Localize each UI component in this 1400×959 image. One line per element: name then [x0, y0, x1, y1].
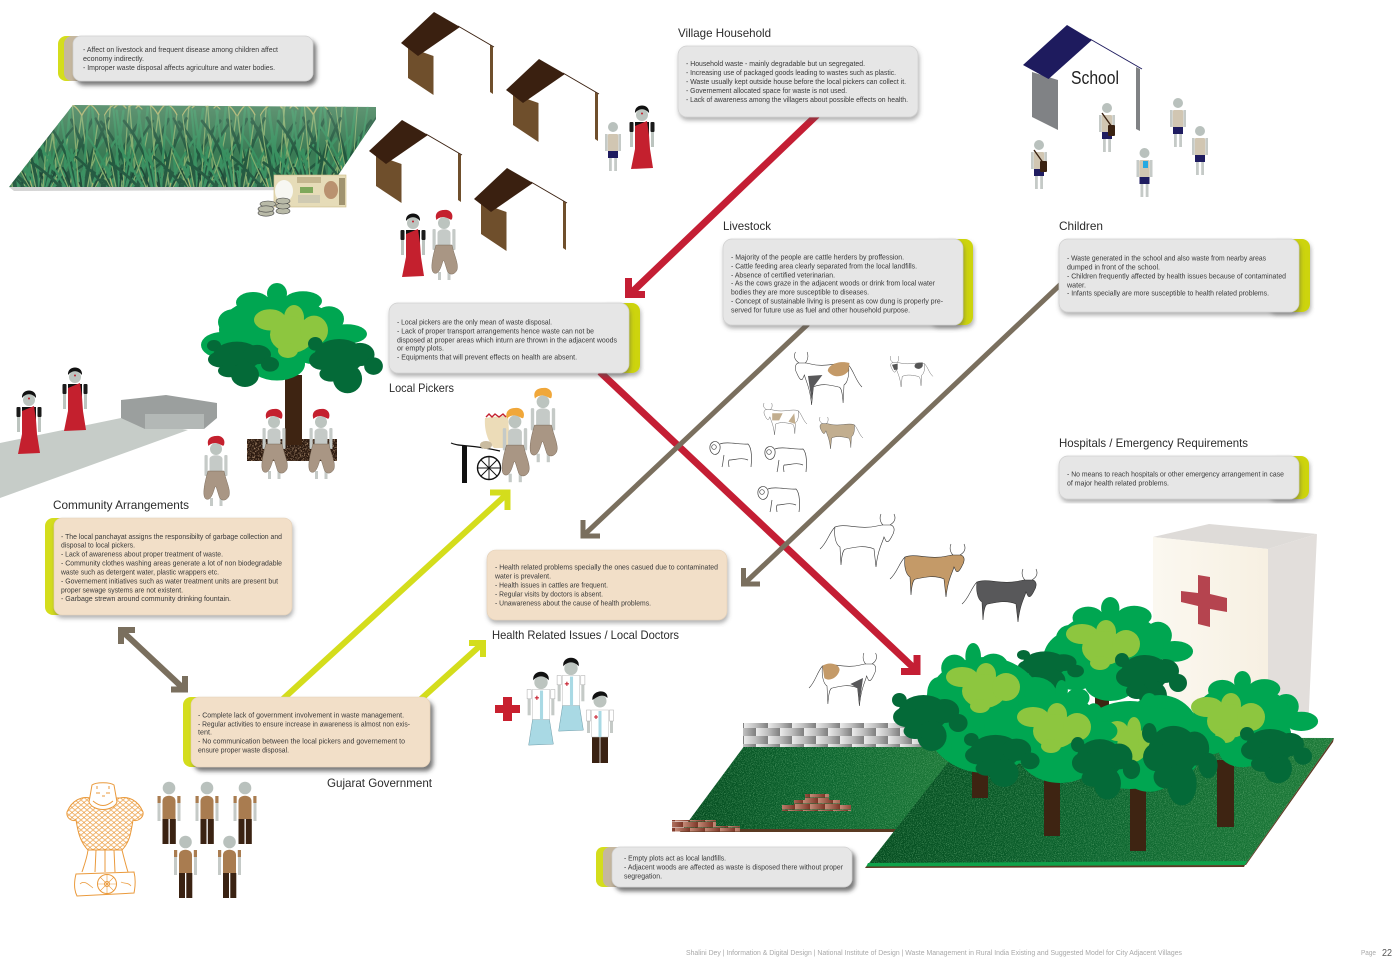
- heading: Local Pickers: [389, 381, 454, 395]
- panel: hospitals: [1059, 436, 1309, 499]
- icon: community men: [204, 409, 334, 506]
- heading: Children: [1059, 219, 1103, 233]
- arrow: government to local pickers: [283, 492, 508, 699]
- panel: livestock: - Absence of certified veterinarian.: [731, 270, 835, 280]
- panel: children: dumped in front of the school.: [1067, 262, 1160, 272]
- panel: hospitals: of major health related problems.: [1067, 478, 1169, 488]
- panel: community arrangements: proper sewage systems are not existent.: [61, 586, 183, 594]
- panel: village household: [678, 26, 918, 117]
- panel: landfills note: segregation.: [624, 872, 662, 880]
- arrow: children to health: [744, 283, 1062, 584]
- footer: [686, 948, 1392, 959]
- left tree: [892, 643, 1057, 773]
- panel: health related issues: - Unawareness about the cause of health problems.: [495, 598, 651, 608]
- panel: children: [1059, 219, 1310, 312]
- panel: community arrangements: - Community clothes washing areas generate a lot of non biodegradable: [61, 558, 282, 568]
- woods ground: [865, 737, 1334, 868]
- panel: livestock: - Majority of the people are cattle herders by proffession.: [731, 252, 904, 262]
- arrow: village household to local pickers: [628, 115, 817, 295]
- middle trees: [964, 680, 1226, 805]
- arrow: government to health: [421, 643, 483, 699]
- icon: women on road: [0, 368, 217, 498]
- icon: three large cattle: [820, 514, 1037, 622]
- arrow: local pickers to woods: [600, 372, 917, 672]
- icon: picker cart: [451, 414, 510, 483]
- heading: Livestock: [723, 219, 772, 233]
- icon: waste pickers: [502, 388, 557, 482]
- panel: community arrangements: [45, 498, 292, 615]
- panel: gujarat government: - No communication between the local pickers and governement to: [198, 736, 405, 746]
- panel: village household: - Household waste - mainly degradable but un segregated.: [686, 59, 865, 68]
- panel: gujarat government: ensure proper waste disposal.: [198, 746, 289, 754]
- icon: doctors and red cross: [495, 658, 614, 763]
- panel: village household: - Increasing use of packaged goods leading to wastes such as plastic.: [686, 68, 896, 77]
- panel: children: - Waste generated in the school and also waste from nearby areas: [1067, 254, 1266, 262]
- panel: village household: - Lack of awareness among the villagers about possible effects on health.: [686, 95, 908, 104]
- panel: gujarat government: [183, 697, 433, 790]
- icon: community tree: [201, 283, 383, 461]
- heading: Community Arrangements: [53, 498, 189, 512]
- icon: villager couple: [400, 210, 457, 280]
- panel: local pickers: - Local pickers are the only mean of waste disposal.: [397, 318, 552, 326]
- hospital building: [1153, 524, 1317, 730]
- panel: livestock: - As the cows graze in the adjacent woods or drink from local water: [731, 278, 935, 288]
- panel: landfills note: - Adjacent woods are affected as waste is disposed there without proper: [624, 862, 843, 872]
- panel: health related issues: [487, 550, 727, 642]
- panel: livestock: - Cattle feeding area clearly separated from the local landfills.: [731, 262, 917, 270]
- house: [474, 168, 567, 251]
- panel: health related issues: water is prevalent.: [494, 572, 551, 580]
- panel: community arrangements: - The local panchayat assigns the responsibilty of garbage collection and: [61, 532, 282, 541]
- panel: village household: - Waste usually kept outside house before the local pickers can collect it.: [686, 77, 906, 86]
- brick pile: [672, 820, 740, 832]
- school building: [1023, 25, 1142, 131]
- panel: community arrangements: - Garbage strewn around community drinking fountain.: [61, 594, 231, 603]
- house: [369, 120, 462, 203]
- panel: community arrangements: waste such as detergent water, plastic wrappers etc.: [60, 568, 219, 576]
- icon: government officials: [158, 782, 256, 898]
- panel: livestock: bodies they are more susceptible to diseases.: [731, 288, 869, 296]
- panel: hospitals: - No means to reach hospitals or other emergency arrangement in case: [1067, 470, 1284, 478]
- right tree: [1120, 671, 1318, 783]
- panel: health related issues: - Health issues in cattles are frequent.: [495, 580, 608, 590]
- heading: Hospitals / Emergency Requirements: [1059, 436, 1248, 450]
- house: [401, 12, 494, 95]
- arrow: livestock to health: [583, 324, 808, 536]
- panel: local pickers: - Equipments that will prevent effects on health are absent.: [397, 352, 577, 362]
- icon: ashoka emblem: [67, 783, 143, 896]
- panel: livestock: - Concept of sustainable living is present as cow dung is properly pre-: [731, 296, 943, 306]
- school building: School: [1071, 68, 1119, 88]
- panel: community arrangements: disposal to local pickers.: [61, 540, 135, 550]
- panel: livestock: [723, 219, 973, 325]
- back tree: [1017, 597, 1193, 711]
- panel: health related issues: - Regular visits by doctors is absent.: [495, 590, 603, 598]
- arrow: community to government double headed: [121, 630, 185, 690]
- panel: agriculture effects: economy indirectly.: [83, 54, 144, 63]
- panel: landfills note: [596, 847, 852, 887]
- panel: children: - Infants specially are more susceptible to health related problems.: [1067, 288, 1269, 298]
- heading: Health Related Issues / Local Doctors: [492, 628, 679, 642]
- boundary wall: [743, 723, 968, 747]
- icon: school children: [1031, 98, 1208, 197]
- panel: local pickers: or empty plots.: [397, 344, 444, 352]
- footer: Shalini Dey | Information & Digital Design | National Institute of Design | Waste Management in Rural India Existing and Suggested Model for City Adjacent Villages: [686, 950, 1182, 957]
- panel: agriculture effects: [58, 36, 313, 81]
- panel: agriculture effects: - Affect on livestock and frequent disease among children affect: [83, 45, 279, 54]
- heading: Gujarat Government: [327, 776, 433, 790]
- icon: rupee note and coins: [258, 175, 346, 216]
- heading: Village Household: [678, 26, 771, 40]
- panel: village household: - Governement allocated space for waste is not used.: [686, 86, 847, 95]
- house: [506, 59, 599, 142]
- icon: villagers near top houses: [605, 106, 654, 171]
- icon: patchy cow near plot: [809, 653, 876, 706]
- panel: community arrangements: - Lack of awareness about proper treatment of waste.: [61, 550, 223, 558]
- rice field: [9, 105, 376, 191]
- footer: Page: [1361, 950, 1376, 957]
- icon: livestock group: [710, 352, 933, 512]
- panel: local pickers: [389, 303, 640, 395]
- panel: children: water.: [1066, 280, 1086, 290]
- panel: gujarat government: tent.: [198, 728, 212, 736]
- panel: health related issues: - Health related problems specially the ones casued due to contaminated: [495, 562, 718, 572]
- footer: 22: [1382, 948, 1392, 959]
- panel: local pickers: - Lack of proper transport arrangements hence waste can not be: [397, 326, 594, 336]
- panel: landfills note: - Empty plots act as local landfills.: [624, 854, 726, 862]
- tree trunks: [972, 680, 1234, 851]
- panel: agriculture effects: - Improper waste disposal affects agriculture and water bodies.: [83, 63, 275, 72]
- panel: children: - Children frequently affected by health issues because of contaminated: [1067, 272, 1286, 280]
- panel: community arrangements: - Governement initiatives such as water treatment units are present but: [61, 576, 279, 586]
- panel: gujarat government: - Complete lack of government involvement in waste management.: [198, 710, 404, 720]
- empty plot ground: [680, 747, 965, 832]
- panel: livestock: served for future use as fuel and other household purpose.: [731, 306, 910, 314]
- panel: local pickers: disposed at proper areas which inturn are thrown in the adjacent woods: [397, 336, 617, 344]
- woods canopy: [892, 597, 1318, 805]
- panel: gujarat government: - Regular activities to ensure increase in awareness is almost non exis-: [198, 720, 410, 728]
- brick pile: [782, 794, 851, 811]
